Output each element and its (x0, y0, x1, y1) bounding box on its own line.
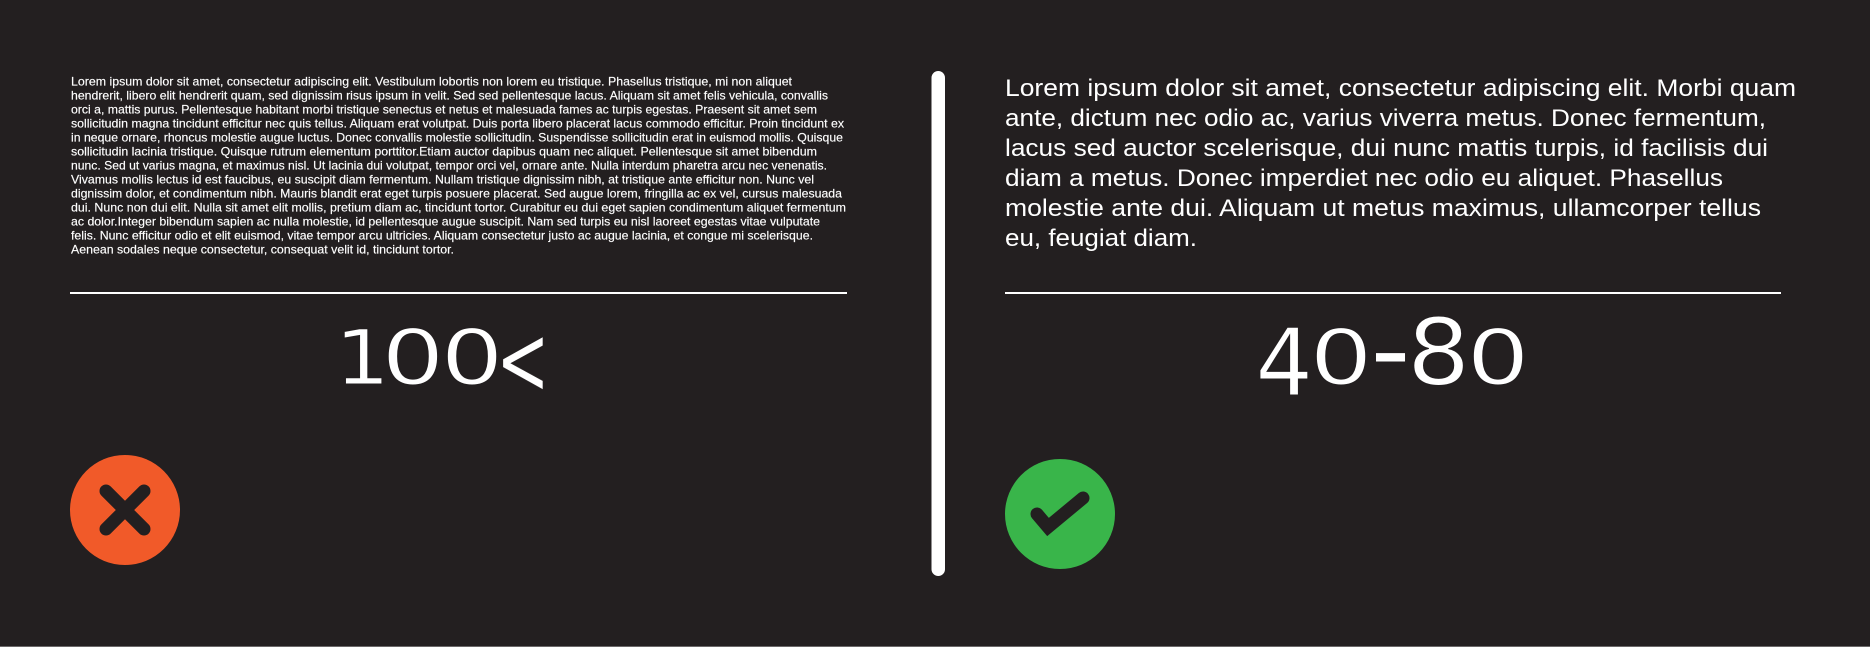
icon: orange cross (70, 455, 180, 565)
text block: left small paragraph: orci a, mattis purus. Pellentesque habitant morbi tristique senectus et netus et malesuada fames ac turpis egestas. Praesent sit amet sem (71, 104, 817, 116)
text block: right large paragraph: lacus sed auctor scelerisque, dui nunc mattis turpis, id facilisis dui (1005, 135, 1768, 162)
big number: 100<: 1 (334, 314, 390, 403)
text block: left small paragraph: sollicitudin magna tincidunt efficitur nec quis tellus. Aliquam erat volutpat. Duis porta libero placerat lacus commodo efficitur. Proin tincidunt ex (71, 118, 844, 130)
text block: right large paragraph (1005, 75, 1796, 252)
text block: left small paragraph: Lorem ipsum dolor sit amet, consectetur adipiscing elit. Vestibulum lobortis non lorem eu tristique. Phasellus tristique, mi non aliquet (71, 76, 793, 88)
panel: right comparison (1005, 75, 1796, 569)
text block: right large paragraph: Lorem ipsum dolor sit amet, consectetur adipiscing elit. Morbi quam (1005, 75, 1796, 102)
text block: left small paragraph: ac dolor.Integer bibendum sapien ac nulla molestie, id pellentesque augue suscipit. Nam sed turpis eu nisl laoreet egestas vitae vulputate (71, 216, 820, 228)
big number: 40-80: 0 (1467, 313, 1529, 402)
text block: left small paragraph: Aenean sodales neque consectetur, consequat velit id, tincidunt tortor. (71, 244, 454, 256)
text block: left small paragraph: dignissim dolor, et condimentum nibh. Mauris blandit erat eget turpis posuere placerat. Sed augue lorem, fringilla ac ex vel, cursus malesuada (71, 188, 843, 200)
big number: 100< (334, 304, 550, 418)
big number: 40-80: - (1371, 289, 1410, 411)
text block: right large paragraph: eu, feugiat diam. (1005, 225, 1197, 252)
text block: left small paragraph: nunc. Sed ut varius magna, et maximus nisl. Ut lacinia dui volutpat, tempor orci vel, ornare ante. Nulla interdum pharetra arcu nec venenatis. (71, 160, 827, 172)
text block: left small paragraph: Vivamus mollis lectus id est faucibus, eu suscipit diam fermentum. Nullam tristique dignissim nibh, at tristique ante efficitur non. Nunc vel (71, 174, 814, 186)
panel: left comparison (70, 76, 847, 565)
icon: green check mark (1005, 459, 1115, 569)
text block: left small paragraph: dui. Nunc non dui elit. Nulla sit amet elit mollis, pretium diam ac, tincidunt tortor. Curabitur eu dui eget sapien condimentum aliquet fermentum (71, 202, 846, 214)
text block: right large paragraph: diam a metus. Donec imperdiet nec odio eu aliquet. Phasellus (1005, 165, 1723, 192)
text block: left small paragraph: in neque ornare, rhoncus molestie augue luctus. Donec convallis molestie sollicitudin. Suspendisse sollicitudin erat in euismod mollis. Quisque (71, 132, 843, 144)
text block: right large paragraph: ante, dictum nec odio ac, varius viverra metus. Donec fermentum, (1005, 105, 1766, 132)
big number: 100<: 00 (382, 313, 503, 402)
text block: left small paragraph (71, 76, 846, 256)
big number: 40-80: 8 (1407, 298, 1470, 406)
center vertical divider (932, 71, 945, 576)
text block: left small paragraph: hendrerit, libero elit hendrerit quam, sed dignissim risus ipsum in velit. Sed sed pellentesque lacus. Aliquam sit amet felis vehicula, convallis (71, 90, 828, 102)
big number: 40-80: 4 (1256, 309, 1313, 417)
text block: right large paragraph: molestie ante dui. Aliquam ut metus maximus, ullamcorper tellus (1005, 195, 1761, 222)
text block: left small paragraph: sollicitudin lacinia tristique. Quisque rutrum elementum porttitor.Etiam auctor dapibus quam nec aliquet. Pellentesque sit amet bibendum (71, 146, 817, 158)
text block: left small paragraph: felis. Nunc efficitur odio et elit euismod, vitae tempor arcu ultricies. Aliquam consectetur justo ac augue lacinia, et congue mi scelerisque. (71, 230, 813, 242)
big number: 40-80 (1256, 289, 1529, 417)
big number: 40-80: 0 (1310, 313, 1372, 402)
big number: 100<: < (496, 304, 550, 418)
